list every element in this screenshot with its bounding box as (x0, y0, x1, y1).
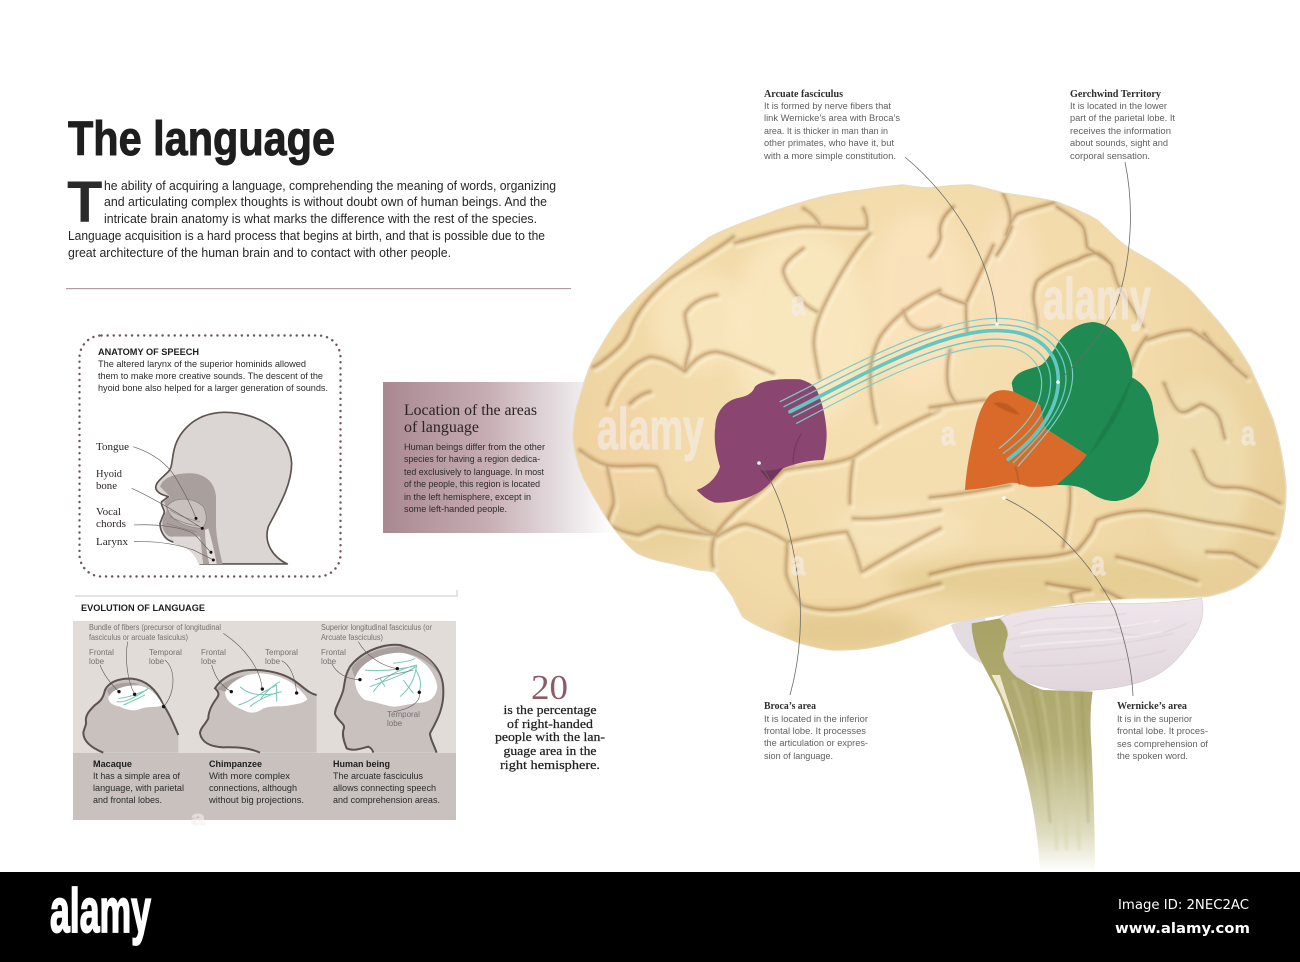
panel: evolution of language (73, 603, 456, 820)
intro lines: and articulating complex thoughts is without doubt own of human beings. And the (104, 194, 547, 209)
caption: human being: The arcuate fasciculus (333, 771, 423, 782)
statistic text: people with the lan- (495, 729, 605, 744)
small lobe labels: lobe (387, 719, 403, 728)
callout text: in the left hemisphere, except in (404, 492, 531, 503)
annotation: Wernicke's area: It is in the superior (1117, 714, 1193, 725)
annotation: Broca's area: It is located in the inferior (764, 714, 869, 725)
annotation: Gerchwind Territory: corporal sensation. (1070, 151, 1150, 162)
statistic: 20 percent (495, 668, 605, 772)
annotation: Wernicke's area: ses comprehension of (1117, 739, 1208, 750)
language area: Wernicke's (orange) (965, 390, 1087, 490)
speech labels: chords (96, 519, 126, 530)
annotation: Gerchwind Territory: Gerchwind Territory (1070, 89, 1161, 100)
annotation: Broca's area: frontal lobe. It processes (764, 726, 866, 737)
caption: human being: and comprehension areas. (333, 795, 440, 806)
image id: Image ID: 2NEC2AC (1118, 897, 1249, 913)
annotation: Broca's area: Broca’s area (764, 701, 816, 712)
sulci shading (580, 208, 943, 614)
callout: location of the areas of language (383, 382, 613, 533)
leader line: Broca's area (757, 461, 800, 695)
small lobe labels: lobe (201, 657, 217, 666)
speech labels: Hyoid (96, 469, 123, 480)
caption: chimpanzee: Chimpanzee (209, 759, 262, 770)
callout text (404, 442, 545, 515)
callout text: Human beings differ from the other (404, 442, 545, 453)
small lobe labels: Frontal (89, 648, 114, 657)
annotation: Gerchwind Territory: about sounds, sight and (1070, 138, 1168, 149)
intro lines: he ability of acquiring a language, comprehending the meaning of words, organizing (104, 178, 556, 193)
small lobe labels: lobe (321, 657, 337, 666)
annotation: Arcuate fasciculus: with a more simple constitution. (763, 151, 896, 162)
speech labels (96, 442, 129, 548)
watermarks: a (941, 415, 956, 453)
annotation: Gerchwind Territory: receives the information (1070, 126, 1171, 137)
caption: human being: allows connecting speech (333, 783, 436, 794)
annotation: Wernicke's area: Wernicke’s area (1117, 701, 1187, 712)
small lobe labels: Bundle of fibers (precursor of longitudinal (89, 623, 221, 632)
annotation: Arcuate fasciculus: other primates, who have it, but (764, 138, 894, 149)
watermarks: a (1241, 415, 1256, 453)
caption: chimpanzee: without big projections. (208, 795, 304, 806)
intro lines: intricate brain anatomy is what marks the difference with the rest of the species. (104, 211, 537, 226)
small lobe labels: Temporal (387, 710, 420, 719)
watermarks: alamy (1043, 267, 1151, 332)
small lobe labels: Superior longitudinal fasciculus (or (321, 623, 432, 632)
head: human being (332, 642, 443, 753)
annotation: Wernicke's area: the spoken word. (1117, 751, 1188, 762)
anatomy text: hyoid bone also helped for a larger generation of sounds. (98, 383, 328, 394)
head: macaque (83, 642, 178, 753)
heading: evolution of language: EVOLUTION OF LANGUAGE (81, 603, 205, 614)
footer logo: alamy (50, 877, 151, 946)
caption: macaque: language, with parietal (93, 783, 184, 794)
watermarks (191, 267, 1256, 830)
small lobe labels: Arcuate fasciculus) (321, 633, 383, 642)
statistic text: guage area in the (504, 743, 597, 758)
small lobe labels: lobe (149, 657, 165, 666)
watermarks: a (791, 285, 806, 323)
brain (573, 157, 1286, 696)
footer bar (0, 872, 1300, 962)
anatomy text: The altered larynx of the superior hominids allowed (98, 359, 306, 370)
small lobe labels: Temporal (149, 648, 182, 657)
head cross-section diagram (132, 412, 292, 564)
caption: macaque: Macaque (93, 759, 132, 770)
leader line: Arcuate fasciculus (905, 157, 999, 326)
annotation: Arcuate fasciculus: Arcuate fasciculus (764, 89, 843, 100)
caption: chimpanzee (208, 759, 304, 806)
caption: chimpanzee: With more complex (209, 771, 290, 782)
annotation: Broca's area: the articulation or expres- (764, 738, 868, 749)
small lobe labels: Frontal (201, 648, 226, 657)
small lobe labels: Frontal (321, 648, 346, 657)
leader line: Gerchwind territory (1056, 162, 1130, 384)
annotation: Wernicke's area (1117, 701, 1208, 762)
language area: Gerchwind territory (green) (1012, 322, 1159, 501)
annotation: Arcuate fasciculus (763, 89, 900, 162)
brainstem (972, 618, 1095, 872)
dotted frame (80, 336, 340, 576)
annotation: Broca's area: sion of language. (764, 751, 833, 762)
small lobe labels: Temporal (265, 648, 298, 657)
title: The language (68, 113, 335, 166)
callout heading (404, 402, 537, 436)
caption: macaque: It has a simple area of (93, 771, 180, 782)
arcuate fasciculus fibers (780, 318, 1073, 466)
callout heading: Location of the areas (404, 402, 537, 419)
cerebellum rear part (951, 618, 1000, 670)
speech labels: Vocal (96, 507, 121, 518)
leader line: Wernicke's area (1002, 496, 1133, 696)
annotation: Arcuate fasciculus: It is formed by nerve fibers that (764, 101, 891, 112)
evolution background (73, 621, 456, 820)
callout text: ted exclusively to language. In most (404, 467, 544, 478)
anatomy text (98, 359, 328, 394)
head: chimpanzee (200, 633, 317, 753)
callout text: of the people, this region is located (404, 479, 540, 490)
statistic text: of right-handed (507, 716, 594, 731)
small lobe labels: fasciculus or arcuate fasiculus) (89, 633, 188, 642)
statistic text: right hemisphere. (500, 757, 600, 772)
cerebellum (1000, 598, 1203, 691)
caption: chimpanzee: connections, although (209, 783, 297, 794)
anatomy text: them to make more creative sounds. The descent of the (98, 371, 323, 382)
caption: human being: Human being (333, 759, 390, 770)
speech labels: Larynx (96, 537, 129, 548)
caption: macaque: and frontal lobes. (93, 795, 162, 806)
callout heading: of language (404, 419, 479, 436)
drop cap: T (67, 170, 102, 235)
annotation: Broca's area (764, 701, 869, 762)
language area: Broca's (purple) (697, 379, 827, 503)
annotation: Gerchwind Territory (1070, 89, 1175, 162)
callout text: some left-handed people. (404, 504, 507, 515)
heading: anatomy of speech: ANATOMY OF SPEECH (98, 347, 199, 358)
callout text: species for having a region dedica- (404, 454, 540, 465)
annotation: Gerchwind Territory: It is located in the lower (1070, 101, 1168, 112)
intro lines (68, 178, 556, 260)
watermarks: a (191, 808, 206, 830)
watermarks: a (1091, 545, 1106, 583)
small lobe labels: lobe (265, 657, 281, 666)
small lobe labels (89, 623, 432, 728)
annotation: Gerchwind Territory: part of the parietal lobe. It (1070, 113, 1175, 124)
intro lines: great architecture of the human brain and to contact with other people. (68, 245, 451, 260)
website: www.alamy.com (1115, 921, 1250, 937)
annotation: Wernicke's area: frontal lobe. It proces- (1117, 726, 1208, 737)
annotation: Arcuate fasciculus: link Wernicke’s area with Broca’s (764, 113, 900, 124)
intro text block (67, 170, 556, 260)
watermarks: a (791, 545, 806, 583)
speech labels: Tongue (96, 442, 129, 453)
number 20: 20 (531, 668, 568, 707)
speech labels: bone (96, 481, 117, 492)
watermarks: alamy (597, 397, 704, 462)
caption: macaque (93, 759, 184, 806)
intro lines: Language acquisition is a hard process that begins at birth, and that is possible due to the (68, 228, 545, 243)
statistic text: is the percentage (504, 702, 597, 717)
annotation: Arcuate fasciculus: area. It is thicker in man than in (764, 126, 888, 137)
small lobe labels: lobe (89, 657, 105, 666)
statistic text (495, 702, 605, 772)
caption: human being (333, 759, 440, 806)
panel: anatomy of speech (80, 336, 340, 576)
brainstem and cerebellum (951, 598, 1203, 872)
